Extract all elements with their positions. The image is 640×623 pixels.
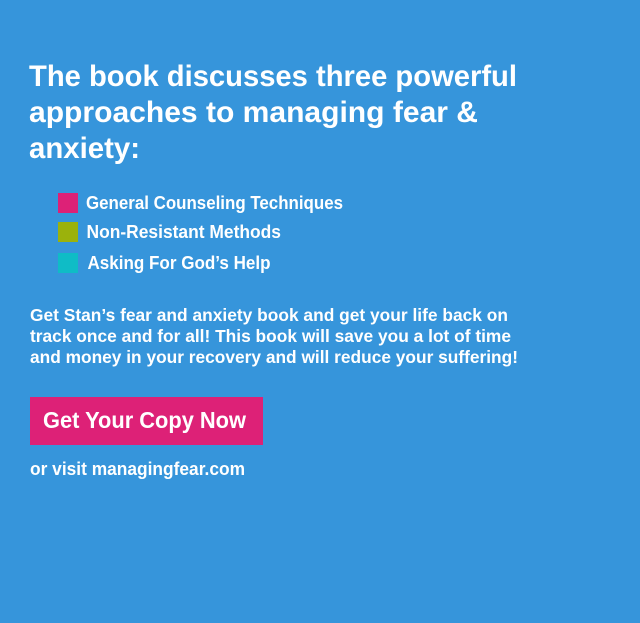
body paragraph [30,305,518,367]
title: approaches to managing fear & [29,96,478,129]
website note: or visit managingfear.com [30,459,245,479]
call-to-action button: Get Your Copy Now [43,407,246,433]
list item: asking for God's help: Asking For God’s Help [88,253,270,273]
list of approaches [58,193,343,273]
body paragraph: and money in your recovery and will reduce your suffering! [30,347,518,367]
body paragraph: track once and for all! This book will save you a lot of time [30,326,511,346]
list item: non-resistant methods: Non-Resistant Methods [86,222,281,242]
list item: general counseling techniques: General Counseling Techniques [86,193,343,213]
title [29,60,517,165]
title: The book discusses three powerful [29,60,517,93]
call-to-action button [30,397,263,445]
title: anxiety: [29,132,140,165]
body paragraph: Get Stan’s fear and anxiety book and get your life back on [30,305,508,325]
